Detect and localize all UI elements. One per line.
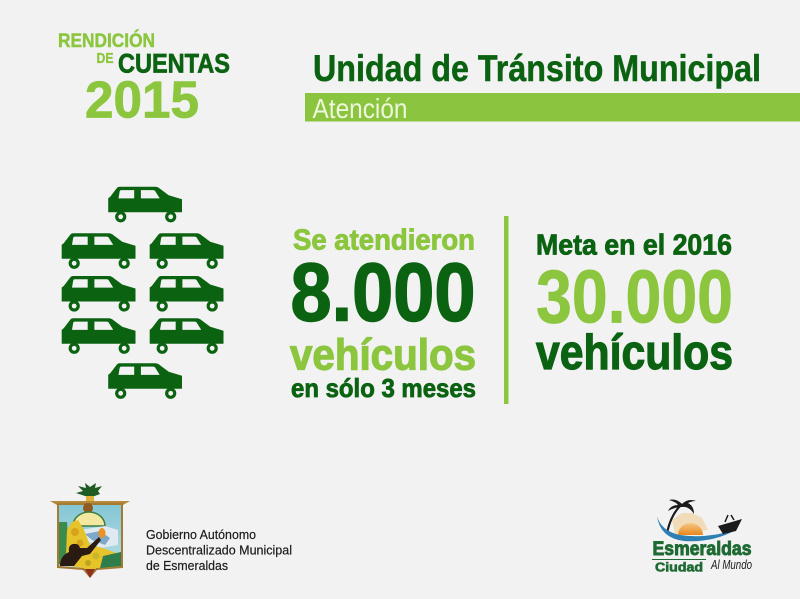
divider: [504, 216, 508, 404]
palm: [667, 504, 682, 533]
stat block: vehicles attended: 8.000: [290, 246, 476, 338]
section bar: Atención: [305, 93, 800, 124]
mountains and clouds: [80, 526, 118, 548]
icon: municipal coat of arms: [50, 483, 130, 578]
crossbar: [50, 501, 130, 505]
logo: Rendición de Cuentas 2015: RENDICIÓN: [58, 28, 155, 52]
wave: [657, 516, 736, 541]
stat block: 2016 goal: vehículos: [536, 326, 733, 380]
wordmark: Esmeraldas: [652, 539, 752, 560]
sun: [678, 523, 703, 535]
icon: Esmeraldas Ciudad al Mundo logo: [652, 500, 752, 574]
section bar: Atención: Atención: [312, 93, 408, 124]
text block: institution name: [146, 527, 292, 573]
stat block: vehicles attended: [290, 224, 476, 403]
medallion: [83, 503, 93, 513]
logo: Rendición de Cuentas 2015: DE: [96, 51, 114, 67]
right jungle: [100, 552, 121, 568]
stat block: vehicles attended: vehículos: [290, 330, 476, 380]
stat block: vehicles attended: Se atendieron: [293, 224, 475, 256]
bottom point ornament: [85, 569, 95, 578]
icon: Esmeraldas Ciudad al Mundo logo: Al Mundo: [710, 557, 752, 572]
stat block: 2016 goal: Meta en el 2016: [536, 230, 732, 262]
logo: Rendición de Cuentas 2015: CUENTAS: [118, 48, 230, 78]
figure with torch: [60, 537, 101, 566]
icon: Esmeraldas Ciudad al Mundo logo: Ciudad: [655, 560, 703, 574]
stat block: 2016 goal: [536, 230, 733, 380]
yellow foliage: [66, 520, 121, 575]
shield: [57, 503, 123, 578]
palm tree: [76, 483, 102, 497]
logo: Rendición de Cuentas 2015: [58, 28, 230, 130]
text block: institution name: Descentralizado Municipal: [146, 542, 292, 558]
logo: Rendición de Cuentas 2015: 2015: [85, 72, 199, 130]
left jungle: [59, 522, 68, 565]
text block: institution name: de Esmeraldas: [146, 558, 228, 573]
sun rays: [672, 513, 708, 534]
text block: institution name: Gobierno Autónomo: [146, 527, 256, 542]
stat block: vehicles attended: en sólo 3 meses: [291, 373, 476, 403]
icon group: eight green cars: [62, 187, 224, 399]
stat block: 2016 goal: 30.000: [536, 254, 733, 338]
boat: [718, 519, 742, 534]
